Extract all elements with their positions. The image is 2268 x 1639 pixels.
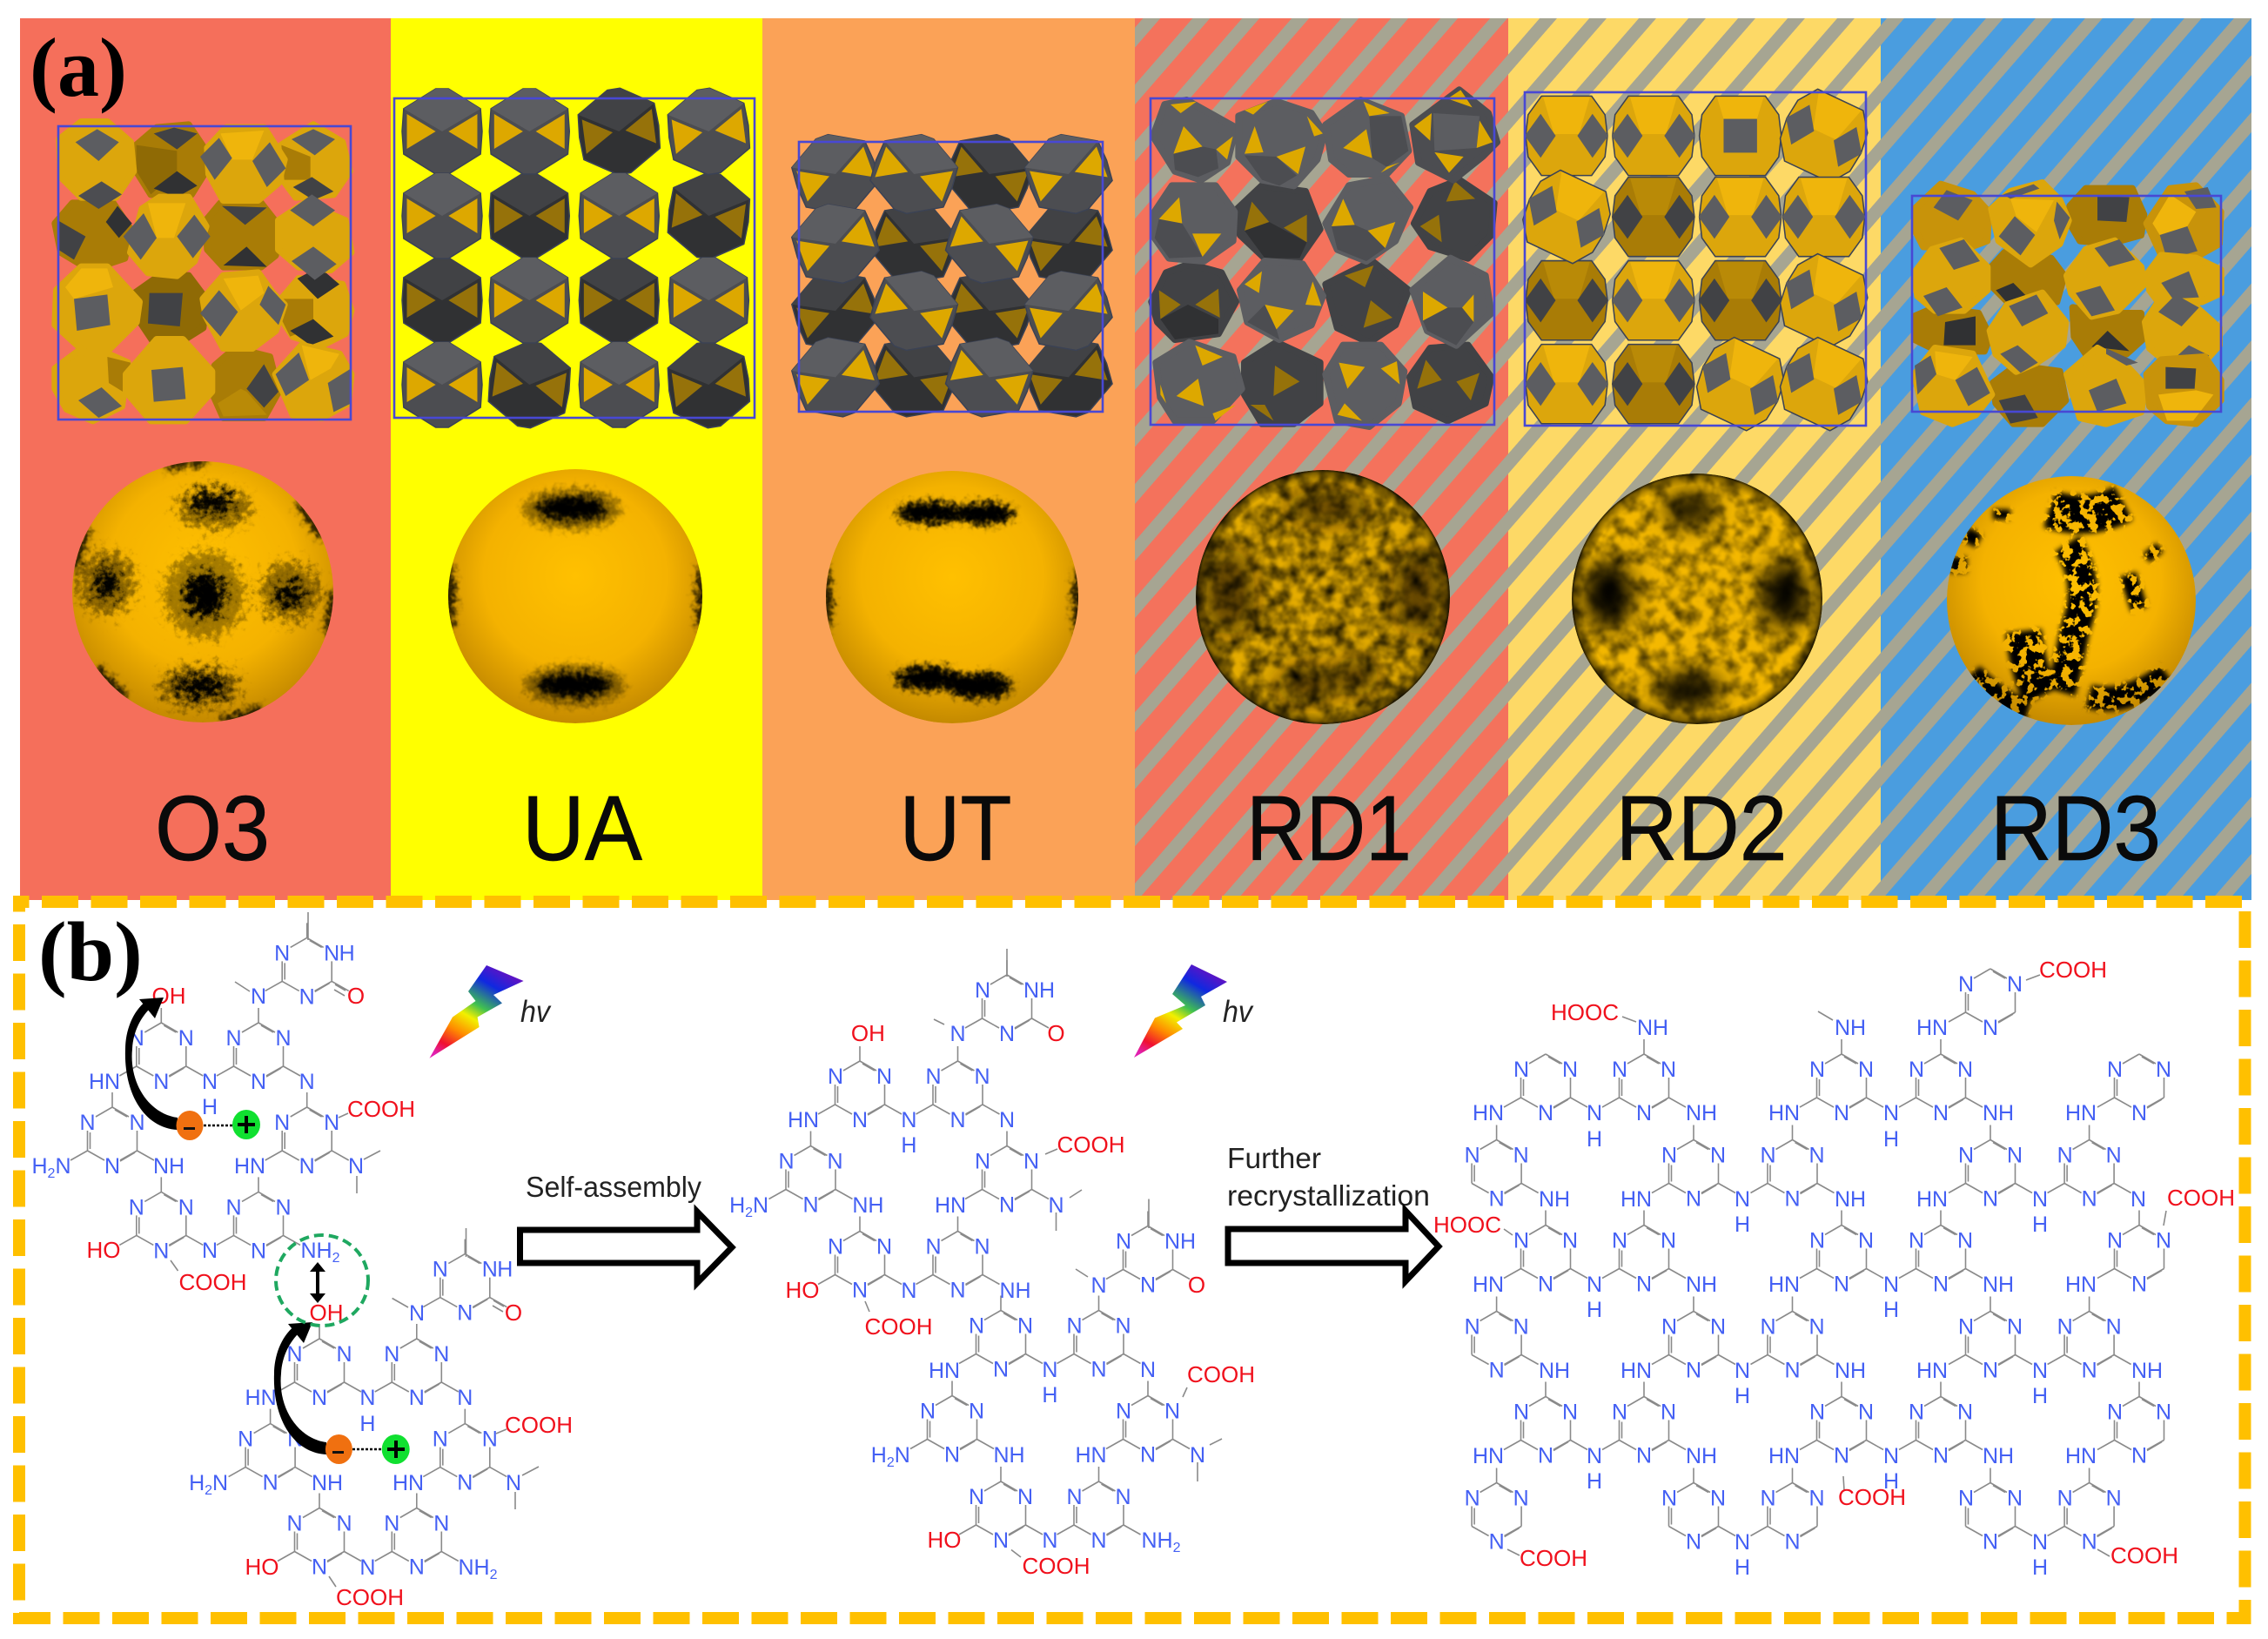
molecule: middle self-assembled fragment: HN — [929, 1359, 960, 1383]
molecule: left lower melon fragment: O — [505, 1300, 522, 1326]
label: Further recrystallization: Further — [1227, 1142, 1321, 1174]
molecule: middle self-assembled fragment: HN — [788, 1108, 819, 1132]
cluster: UA superlattice — [394, 84, 755, 433]
molecule: right crystalline network: NH — [1983, 1444, 2014, 1468]
molecule: middle self-assembled fragment: 2 — [887, 1455, 895, 1470]
molecule: right crystalline network: COOH — [2167, 1185, 2235, 1211]
molecule: right crystalline network: HN — [1916, 1016, 1948, 1040]
molecule: right crystalline network: NH — [1686, 1444, 1717, 1468]
label: UA: UA — [522, 777, 642, 880]
molecule: right crystalline network: H — [2032, 1555, 2048, 1580]
molecule: right crystalline network: HN — [2065, 1101, 2097, 1125]
molecule: left upper melon fragment: NNN — [225, 1195, 292, 1263]
label: Self-assembly: Self-assembly — [526, 1171, 701, 1203]
molecule: left upper melon fragment: N — [348, 1154, 364, 1179]
molecule: middle self-assembled fragment: HO — [928, 1527, 961, 1553]
molecule: middle self-assembled fragment: N — [753, 1193, 768, 1218]
sphere: RD2 ligand density — [1572, 474, 1822, 724]
molecule: right crystalline network: N — [1883, 1444, 1899, 1468]
molecule: right crystalline network: NH — [1539, 1187, 1570, 1212]
molecule: right crystalline network: NNN — [1909, 1400, 1973, 1468]
molecule: left lower melon fragment: NH — [312, 1471, 343, 1495]
molecule: middle self-assembled fragment: 2 — [745, 1206, 753, 1220]
molecule: right crystalline network: NNN — [1513, 1058, 1578, 1125]
molecule: left lower melon fragment: HN — [245, 1386, 277, 1410]
label: RD1: RD1 — [1246, 777, 1412, 880]
arrow: upper electron transfer curve — [125, 998, 178, 1130]
molecule: left lower melon fragment: NNN — [384, 1342, 449, 1410]
molecule: right crystalline network: NNN — [2107, 1058, 2171, 1125]
molecule: left lower melon fragment: HN — [393, 1471, 424, 1495]
molecule: middle self-assembled fragment: NNN — [828, 1234, 892, 1302]
column background: RD3 striped — [1881, 18, 2251, 900]
molecule: middle self-assembled fragment: NNN — [969, 1485, 1033, 1553]
molecule: left lower melon fragment: 2 — [205, 1483, 212, 1498]
molecule: right crystalline network: H — [1883, 1127, 1899, 1152]
molecule: left upper melon fragment: 2 — [332, 1251, 340, 1266]
molecule: middle self-assembled fragment: COOH — [1022, 1553, 1090, 1579]
molecule: right crystalline network: NNN — [1465, 1144, 1529, 1212]
column background: UT — [762, 18, 1135, 900]
molecule: middle self-assembled fragment: O — [1188, 1272, 1205, 1298]
molecule: right crystalline network: NNN — [1760, 1144, 1825, 1212]
molecule: left lower melon fragment: N — [212, 1471, 228, 1495]
column background: UA — [391, 18, 762, 900]
cluster: RD2 superlattice — [1512, 82, 1878, 438]
molecule: middle self-assembled fragment: N — [901, 1279, 916, 1303]
sphere: UA ligand density — [446, 469, 706, 723]
label: Further recrystallization — [1227, 1142, 1430, 1212]
molecule: right crystalline network: N — [1883, 1273, 1899, 1297]
molecule: right crystalline network: NNN — [2057, 1144, 2122, 1212]
molecule: right crystalline network: NNN — [2107, 1229, 2171, 1297]
molecule: right crystalline network: HN — [1916, 1187, 1948, 1212]
molecule: left lower melon fragment: NNHN — [433, 1258, 513, 1326]
molecule: right crystalline network: COOH — [2039, 957, 2107, 983]
label: RD3: RD3 — [1990, 777, 2161, 880]
molecule: left upper melon fragment: N — [299, 1070, 315, 1094]
molecule: left upper melon fragment: NNN — [274, 1111, 339, 1179]
cluster: RD1 superlattice — [1151, 90, 1497, 427]
molecule: left lower melon fragment: H — [189, 1471, 205, 1495]
molecule: left upper melon fragment: NNN — [225, 1026, 292, 1094]
molecule: middle self-assembled fragment: NNHN — [1116, 1229, 1196, 1297]
molecule: right crystalline network: H — [2032, 1384, 2048, 1408]
molecule: right crystalline network: NNN — [1661, 1314, 1726, 1382]
molecule: right crystalline network: HN — [1768, 1273, 1800, 1297]
molecule: right crystalline network: NNN — [1909, 1058, 1973, 1125]
molecule: left lower melon fragment — [189, 1228, 573, 1610]
molecule: right crystalline network: NNN — [1958, 1487, 2023, 1555]
molecule: right crystalline network: HN — [2065, 1444, 2097, 1468]
molecule: left upper melon fragment: 2 — [48, 1166, 56, 1181]
molecule: right crystalline network: N — [2032, 1359, 2048, 1383]
molecule: right crystalline network: HN — [1620, 1187, 1652, 1212]
molecule: left lower melon fragment: NH — [458, 1555, 490, 1580]
molecule: right crystalline network: NNN — [2057, 1314, 2122, 1382]
column background: RD1 striped — [1135, 18, 1508, 900]
label: second hv: hv — [1223, 995, 1254, 1029]
molecule: left lower melon fragment: NNN — [286, 1342, 352, 1410]
arrow: lower electron transfer curve — [274, 1322, 326, 1454]
icon: upper electron hole pair — [176, 1110, 260, 1140]
molecule: left lower melon fragment: NNN — [238, 1427, 303, 1495]
molecule: left upper melon fragment: OH — [151, 983, 186, 1009]
molecule: left upper melon fragment: HN — [89, 1070, 120, 1094]
molecule: left upper melon fragment: COOH — [347, 1096, 415, 1122]
molecule: middle self-assembled fragment: NH — [1141, 1528, 1173, 1553]
molecule: right crystalline network: NNN — [2057, 1487, 2122, 1555]
molecule: left upper melon fragment — [31, 912, 415, 1295]
molecule: right crystalline network: NNN — [1465, 1487, 1529, 1555]
molecule: left lower melon fragment: H — [359, 1412, 375, 1436]
molecule: left lower melon fragment: COOH — [505, 1412, 573, 1438]
column background: O3 — [20, 18, 391, 900]
molecule: middle self-assembled fragment: N — [1140, 1358, 1156, 1382]
molecule: right crystalline network: NH — [1686, 1273, 1717, 1297]
molecule: left upper melon fragment: H — [31, 1154, 48, 1179]
molecule: right crystalline network: HN — [1473, 1444, 1504, 1468]
molecule: left lower melon fragment: N — [506, 1471, 521, 1495]
molecule: middle self-assembled fragment: N — [1090, 1273, 1107, 1298]
label: UT: UT — [900, 777, 1011, 880]
molecule: right crystalline network: NNN — [1809, 1058, 1874, 1125]
molecule: right crystalline network: NNN — [1809, 1400, 1874, 1468]
molecule: right crystalline network — [1433, 957, 2235, 1580]
molecule: right crystalline network: HOOC — [1551, 999, 1619, 1025]
molecule: middle self-assembled fragment: COOH — [865, 1313, 933, 1340]
molecule: right crystalline network: N — [1883, 1101, 1899, 1125]
molecule: right crystalline network: N — [1587, 1273, 1602, 1297]
molecule: middle self-assembled fragment: N — [1190, 1443, 1205, 1468]
molecule: left upper melon fragment: O — [347, 983, 365, 1009]
molecule: middle self-assembled fragment: 2 — [1173, 1541, 1181, 1555]
molecule: left lower melon fragment: N — [359, 1555, 375, 1580]
molecule: left upper melon fragment: NNN — [129, 1195, 194, 1263]
molecule: middle self-assembled fragment: NH — [993, 1443, 1025, 1468]
molecule: right crystalline network: NNN — [1661, 1144, 1726, 1212]
molecule: middle self-assembled fragment: NNN — [969, 1314, 1033, 1382]
molecule: right crystalline network: NNN — [1909, 1229, 1973, 1297]
molecule: right crystalline network: HN — [1768, 1101, 1800, 1125]
sphere: RD1 ligand density — [1196, 470, 1450, 724]
cluster: RD3 superlattice — [1912, 183, 2221, 424]
molecule: right crystalline network: NNN — [1760, 1487, 1825, 1555]
molecule: right crystalline network: NNN — [1465, 1314, 1529, 1382]
molecule: right crystalline network: H — [1735, 1555, 1750, 1580]
molecule: left upper melon fragment: NNHN — [274, 941, 355, 1009]
molecule: middle self-assembled fragment: NNN — [920, 1400, 984, 1468]
molecule: right crystalline network: H — [1587, 1127, 1602, 1152]
molecule: right crystalline network: NH — [1835, 1016, 1866, 1040]
molecule: middle self-assembled fragment: HN — [935, 1193, 966, 1218]
molecule: right crystalline network: COOH — [1838, 1484, 1906, 1510]
molecule: right crystalline network: H — [1587, 1298, 1602, 1322]
molecule: right crystalline network: H — [1587, 1469, 1602, 1494]
icon: lower electron hole pair — [325, 1434, 410, 1464]
molecule: right crystalline network: COOH — [1520, 1545, 1587, 1571]
label: RD2: RD2 — [1615, 777, 1788, 880]
molecule: middle self-assembled fragment: NNN — [1066, 1314, 1131, 1382]
icon: second light bolt — [1134, 964, 1227, 1058]
molecule: right crystalline network: N — [1587, 1101, 1602, 1125]
label: Further recrystallization: recrystallization — [1227, 1179, 1430, 1212]
molecule: left upper melon fragment: NNN — [129, 1026, 194, 1094]
molecule: right crystalline network: N — [2032, 1530, 2048, 1555]
molecule: right crystalline network: NH — [1983, 1273, 2014, 1297]
molecule: left lower melon fragment: NNN — [433, 1427, 498, 1495]
molecule: right crystalline network: NNN — [1958, 1144, 2023, 1212]
molecule: middle self-assembled fragment: N — [999, 1108, 1015, 1132]
molecule: middle self-assembled fragment: O — [1047, 1020, 1065, 1046]
molecule: right crystalline network: NNN — [1612, 1229, 1676, 1297]
molecule: right crystalline network: NNN — [1612, 1058, 1676, 1125]
icon: first light bolt — [430, 965, 524, 1058]
molecule: middle self-assembled fragment: H — [901, 1133, 916, 1158]
molecule: left upper melon fragment: NH — [153, 1154, 185, 1179]
molecule: right crystalline network: NNN — [1661, 1487, 1726, 1555]
molecule: left lower melon fragment: OH — [310, 1300, 343, 1326]
molecule: right crystalline network: HN — [1916, 1359, 1948, 1383]
molecule: right crystalline network: HN — [1473, 1273, 1504, 1297]
cluster: UT superlattice — [784, 123, 1120, 428]
molecule: left upper melon fragment: N — [251, 984, 266, 1009]
molecule: right crystalline network: NNN — [1513, 1229, 1578, 1297]
cluster: O3 superlattice — [55, 122, 351, 420]
molecule: left lower melon fragment: COOH — [336, 1584, 404, 1610]
molecule: right crystalline network: N — [2130, 1187, 2146, 1212]
molecule: right crystalline network: NH — [1983, 1101, 2014, 1125]
molecule: left upper melon fragment: NH — [300, 1239, 332, 1263]
molecule: left upper melon fragment: NNN — [79, 1111, 145, 1179]
molecule: middle self-assembled fragment: N — [949, 1022, 966, 1046]
column background: RD2 striped — [1508, 18, 1881, 900]
molecule: left lower melon fragment: N — [457, 1386, 473, 1410]
molecule: left lower melon fragment: 2 — [490, 1568, 498, 1582]
molecule: middle self-assembled fragment: H — [871, 1443, 887, 1468]
molecule: right crystalline network: NH — [1835, 1359, 1866, 1383]
label: O3: O3 — [155, 777, 270, 880]
molecule: right crystalline network: H — [1883, 1298, 1899, 1322]
molecule: right crystalline network: NNN — [2107, 1400, 2171, 1468]
molecule: right crystalline network: COOH — [2110, 1542, 2178, 1568]
heading: panel label (b): (b) — [38, 905, 143, 999]
panel a: six crystal structure columns — [20, 18, 2251, 900]
molecule: right crystalline network: H — [1735, 1384, 1750, 1408]
molecule: right crystalline network: NH — [2131, 1359, 2163, 1383]
molecule: right crystalline network: NH — [1686, 1101, 1717, 1125]
molecule: middle self-assembled fragment: N — [1048, 1193, 1064, 1218]
molecule: right crystalline network: H — [2032, 1212, 2048, 1237]
molecule: left upper melon fragment: H — [202, 1095, 218, 1119]
molecule: left lower melon fragment: HO — [245, 1554, 278, 1580]
molecule: right crystalline network: HN — [1768, 1444, 1800, 1468]
panel b: dashed frame for reaction scheme — [19, 902, 2245, 1618]
molecule: right crystalline network: HN — [1620, 1359, 1652, 1383]
arrow: recrystallization step — [1228, 1211, 1439, 1281]
molecule: right crystalline network: NNN — [1612, 1400, 1676, 1468]
sphere: O3 ligand density — [72, 461, 333, 722]
molecule: middle self-assembled fragment: NNN — [975, 1149, 1039, 1217]
molecule: middle self-assembled fragment: NH — [852, 1193, 883, 1218]
molecule: right crystalline network: NNN — [1513, 1400, 1578, 1468]
molecule: middle self-assembled fragment: NNN — [778, 1149, 843, 1217]
molecule: right crystalline network: N — [1735, 1359, 1750, 1383]
molecule: left upper melon fragment: N — [202, 1239, 218, 1263]
molecule: right crystalline network: N — [1735, 1187, 1750, 1212]
molecule: right crystalline network: N — [1587, 1444, 1602, 1468]
molecule: right crystalline network: NH — [1637, 1016, 1668, 1040]
callout: hydrogen bonding dashed circle — [276, 1235, 368, 1326]
molecule: right crystalline network: NNN — [1809, 1229, 1874, 1297]
molecule: middle self-assembled fragment: N — [1042, 1528, 1057, 1553]
molecule: middle self-assembled fragment: N — [895, 1443, 910, 1468]
molecule: right crystalline network: N — [2032, 1187, 2048, 1212]
molecule: middle self-assembled fragment: N — [901, 1108, 916, 1132]
molecule: middle self-assembled fragment: NNN — [1066, 1485, 1131, 1553]
molecule: right crystalline network: HOOC — [1433, 1212, 1501, 1238]
molecule: middle self-assembled fragment: N — [1042, 1358, 1057, 1382]
molecule: right crystalline network: H — [1735, 1212, 1750, 1237]
heading: panel label (a): (a) — [30, 21, 127, 114]
sphere: RD3 ligand density — [1947, 476, 2196, 725]
molecule: left lower melon fragment: N — [359, 1386, 375, 1410]
label: first hv: hv — [520, 995, 552, 1029]
molecule: middle self-assembled fragment: NNN — [828, 1065, 892, 1132]
molecule: middle self-assembled fragment: NNN — [1116, 1400, 1180, 1468]
molecule: left upper melon fragment: N — [202, 1070, 218, 1094]
molecule: right crystalline network: NNN — [1958, 972, 2023, 1040]
molecule: right crystalline network: NH — [1835, 1187, 1866, 1212]
molecule: middle self-assembled fragment: NNN — [925, 1234, 990, 1302]
molecule: right crystalline network: NNN — [1760, 1314, 1825, 1382]
molecule: left lower melon fragment: N — [409, 1301, 425, 1326]
molecule: right crystalline network: NH — [1539, 1359, 1570, 1383]
sphere: UT ligand density — [822, 471, 1082, 723]
molecule: left upper melon fragment: N — [55, 1154, 71, 1179]
molecule: right crystalline network: HN — [1473, 1101, 1504, 1125]
molecule: middle self-assembled fragment: COOH — [1187, 1361, 1255, 1387]
molecule: left upper melon fragment: HN — [234, 1154, 265, 1179]
molecule: middle self-assembled fragment: H — [1042, 1383, 1057, 1407]
molecule: right crystalline network: NNN — [1958, 1314, 2023, 1382]
molecule: left upper melon fragment: HO — [87, 1237, 120, 1263]
molecule: right crystalline network: H — [1883, 1469, 1899, 1494]
arrow: self-assembly step — [520, 1212, 732, 1283]
molecule: left lower melon fragment: NNN — [286, 1511, 352, 1579]
molecule: left lower melon fragment: NNN — [384, 1511, 449, 1579]
molecule: left upper melon fragment: COOH — [179, 1269, 247, 1295]
molecule: middle self-assembled fragment — [729, 949, 1255, 1579]
molecule: middle self-assembled fragment: H — [729, 1193, 745, 1218]
molecule: middle self-assembled fragment: HO — [785, 1277, 820, 1303]
molecule: middle self-assembled fragment: HN — [1075, 1443, 1107, 1468]
molecule: middle self-assembled fragment: OH — [851, 1020, 885, 1046]
molecule: middle self-assembled fragment: NH — [999, 1279, 1031, 1303]
molecule: right crystalline network: HN — [2065, 1273, 2097, 1297]
molecule: right crystalline network: N — [1735, 1530, 1750, 1555]
molecule: middle self-assembled fragment: COOH — [1057, 1132, 1124, 1158]
molecule: middle self-assembled fragment: NNHN — [975, 978, 1055, 1046]
molecule: middle self-assembled fragment: NNN — [925, 1065, 990, 1132]
